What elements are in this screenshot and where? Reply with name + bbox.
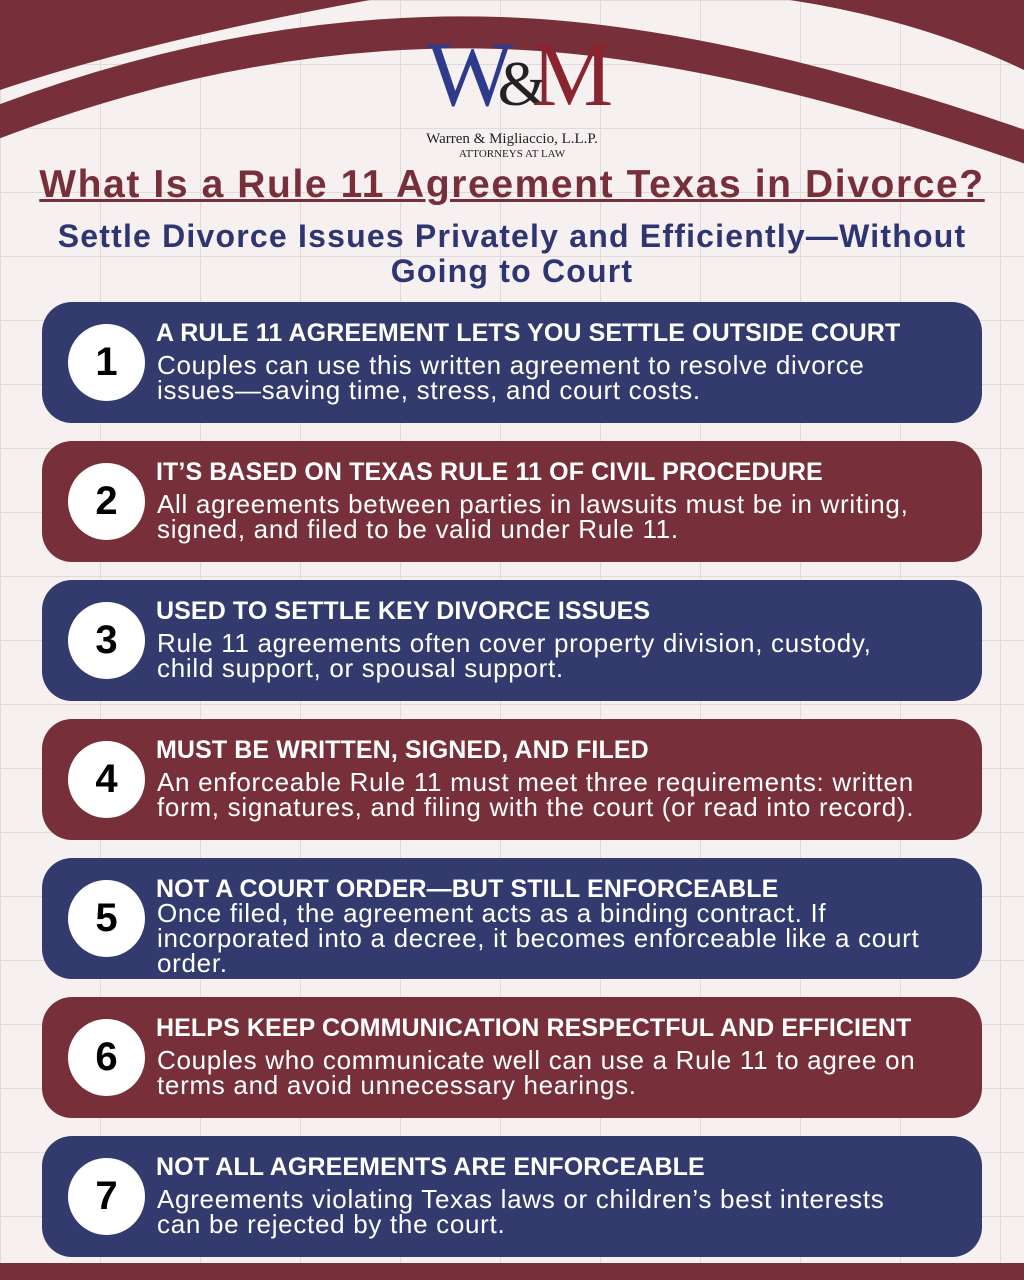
panel 3: child support, or spousal support.	[157, 653, 564, 683]
panel 1: 1	[95, 340, 118, 384]
subtitle	[58, 218, 966, 289]
decorative top arch	[0, 0, 1024, 164]
subtitle: Going to Court	[391, 253, 633, 289]
panel 7: Agreements violating Texas laws or children’s best interests	[157, 1184, 884, 1214]
panel 3: Rule 11 agreements often cover property division, custody,	[157, 628, 872, 658]
logo	[426, 23, 610, 160]
panel 2: All agreements between parties in lawsuits must be in writing,	[157, 489, 909, 519]
logo: Warren & Migliaccio, L.L.P.	[426, 131, 598, 147]
panel 5: incorporated into a decree, it becomes enforceable like a court	[157, 923, 919, 953]
panel 1: issues—saving time, stress, and court costs.	[157, 375, 701, 405]
panel 3	[42, 580, 982, 701]
panel 7	[42, 1136, 982, 1257]
panel 6: 6	[95, 1035, 118, 1079]
panel 5: 5	[95, 896, 118, 940]
panel 4: An enforceable Rule 11 must meet three requirements: written	[157, 767, 914, 797]
panel 6: Couples who communicate well can use a Rule 11 to agree on	[157, 1045, 915, 1075]
panel 6: HELPS KEEP COMMUNICATION RESPECTFUL AND EFFICIENT	[156, 1014, 911, 1042]
panel 1: A RULE 11 AGREEMENT LETS YOU SETTLE OUTSIDE COURT	[156, 319, 900, 347]
panel 2: signed, and filed to be valid under Rule 11.	[157, 514, 679, 544]
panel 5	[42, 858, 982, 979]
panel 3: USED TO SETTLE KEY DIVORCE ISSUES	[156, 597, 650, 625]
panel 7: can be rejected by the court.	[157, 1209, 505, 1239]
panel 7: 7	[95, 1174, 118, 1218]
title: What Is a Rule 11 Agreement Texas in Divorce?	[39, 163, 985, 206]
panel 5: order.	[157, 948, 228, 978]
panel 1: Couples can use this written agreement to resolve divorce	[157, 350, 865, 380]
panel 2: IT’S BASED ON TEXAS RULE 11 OF CIVIL PROCEDURE	[156, 458, 823, 486]
panel 5: Once filed, the agreement acts as a binding contract. If	[157, 898, 826, 928]
panel 2	[42, 441, 982, 562]
bottom bar	[0, 1263, 1024, 1280]
panel 6	[42, 997, 982, 1118]
panel 3: 3	[95, 618, 118, 662]
subtitle: Settle Divorce Issues Privately and Efficiently—Without	[58, 218, 966, 254]
panel 4: 4	[95, 757, 118, 801]
panel 5: NOT A COURT ORDER—BUT STILL ENFORCEABLE	[156, 875, 778, 903]
panel 7: NOT ALL AGREEMENTS ARE ENFORCEABLE	[156, 1153, 705, 1181]
panel 4	[42, 719, 982, 840]
panel 1	[42, 302, 982, 423]
panel 6: terms and avoid unnecessary hearings.	[157, 1070, 637, 1100]
panel 4: form, signatures, and filing with the court (or read into record).	[157, 792, 914, 822]
logo: ATTORNEYS AT LAW	[459, 148, 565, 160]
panel 2: 2	[95, 479, 118, 523]
panel 4: MUST BE WRITTEN, SIGNED, AND FILED	[156, 736, 649, 764]
logo: W&M	[427, 23, 597, 125]
